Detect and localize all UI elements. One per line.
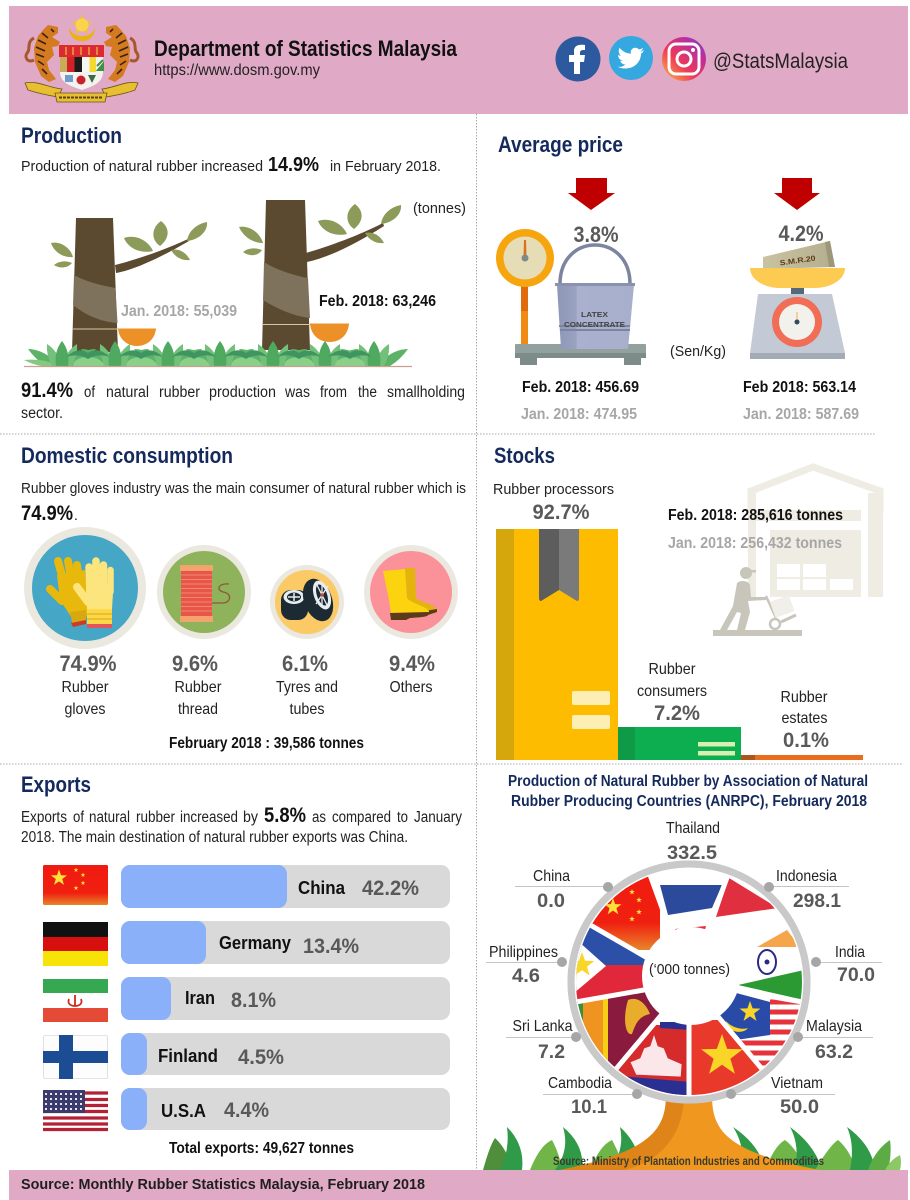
exports sentence: by: [243, 809, 258, 826]
icon: SMR 20 scale with rubber block: [750, 241, 845, 359]
heading: exports: Exports: [21, 772, 91, 797]
panel: ANRPC production: [483, 773, 901, 1170]
SMR20 January price: Jan. 2018: 587.69: [743, 406, 859, 423]
bar: Finland: [121, 1033, 450, 1075]
China value: China: [533, 868, 570, 885]
exports sentence: 5.8%: [264, 804, 306, 827]
chart title: Rubber Producing Countries (ANRPC), February 2018: [511, 793, 867, 810]
production growth sentence: Production of natural rubber increased: [21, 158, 263, 175]
Thailand value: [666, 820, 720, 864]
wheel unit label: (‘000 tonnes): [649, 961, 730, 978]
smallholding sentence: 91.4%: [21, 379, 73, 402]
smallholding sentence: production: [209, 384, 276, 401]
bar: rubber consumers: [618, 727, 741, 760]
icon: rubber gloves: [24, 527, 146, 649]
data source note: Source: Ministry of Plantation Industries and Commodities: [553, 1154, 824, 1168]
February stocks: Feb. 2018: 285,616 tonnes: [668, 507, 843, 524]
Indonesia value: [776, 868, 841, 912]
China value: 0.0: [537, 890, 565, 912]
Thailand value: Thailand: [666, 820, 720, 837]
bar: China: China: [298, 877, 346, 898]
wheel of flags: [568, 860, 810, 1104]
flag: China: [43, 865, 108, 905]
flag: USA: [43, 1090, 108, 1131]
smallholding sentence: sector.: [21, 405, 63, 422]
gloves value: 74.9%: [60, 651, 116, 676]
tree: January: [51, 218, 207, 352]
smallholding sentence: [21, 379, 465, 422]
flag: Iran: [43, 979, 108, 1022]
flag segment: Philippines: [576, 926, 645, 1002]
consumers label: [637, 661, 707, 700]
bar: USA: [121, 1088, 450, 1130]
total exports: Total exports: 49,627 tonnes: [169, 1140, 354, 1157]
flag segment: China: [591, 876, 660, 950]
estates label: estates: [782, 710, 828, 727]
icon: latex scale with bucket: LATEX: [581, 310, 608, 319]
Philippines value: Philippines: [489, 944, 558, 961]
Vietnam value: 50.0: [780, 1096, 819, 1118]
consumers value: 7.2%: [654, 702, 700, 725]
bar: China: 42.2%: [362, 877, 419, 900]
footer source: Source: Monthly Rubber Statistics Malaysia, February 2018: [21, 1176, 425, 1193]
unit label: (tonnes): [413, 200, 466, 217]
latex price change: 3.8%: [574, 222, 618, 247]
SMR20 February price: Feb 2018: 563.14: [743, 379, 856, 396]
grass on right: [483, 1127, 901, 1170]
Indonesia value: Indonesia: [776, 868, 837, 885]
smallholding sentence: natural: [106, 384, 149, 401]
bar: Germany: 13.4%: [303, 935, 359, 958]
Indonesia value: 298.1: [793, 890, 841, 912]
SMR20 price change: 4.2%: [778, 221, 824, 246]
leader lines and dots: [486, 882, 882, 1099]
smallholding sentence: was: [284, 384, 310, 401]
production growth sentence: 14.9%: [268, 154, 319, 176]
icon: facebook: [556, 36, 600, 82]
tyres label: [276, 679, 338, 718]
icon: rubber boots: [364, 545, 458, 639]
panel: domestic consumption: [21, 443, 466, 752]
heading: domestic consumption: Domestic consumption: [21, 443, 233, 468]
bar: Iran: Iran: [185, 987, 215, 1008]
Vietnam value: [771, 1075, 823, 1118]
India value: India: [835, 944, 865, 961]
social handle: @StatsMalaysia: [713, 50, 848, 73]
smallholding sentence: of: [84, 384, 96, 401]
Sri Lanka value: Sri Lanka: [512, 1018, 573, 1035]
exports sentence: as: [312, 809, 326, 826]
bar: China: [121, 865, 450, 908]
Cambodia value: 10.1: [571, 1096, 607, 1118]
exports sentence: of: [73, 809, 85, 826]
thread label: [174, 679, 222, 718]
consumers label: consumers: [637, 683, 707, 700]
India value: 70.0: [837, 964, 875, 986]
exports sentence: [21, 804, 462, 846]
bar: Finland: Finland: [158, 1045, 218, 1066]
flag segment: India: [739, 930, 802, 1000]
January production value: Jan. 2018: 55,039: [121, 303, 237, 320]
estates label: [780, 689, 828, 727]
latex January price: Jan. 2018: 474.95: [521, 406, 637, 423]
website url: https://www.dosm.gov.my: [154, 62, 320, 79]
bar: Finland: 4.5%: [238, 1046, 284, 1069]
tyres label: tubes: [290, 701, 324, 718]
bar: Germany: [121, 921, 450, 964]
icon: rubber thread spool: [157, 545, 251, 639]
department name: Department of Statistics Malaysia: [154, 36, 458, 61]
arrow: latex price down: [568, 178, 615, 210]
Sri Lanka value: 7.2: [538, 1041, 565, 1063]
estates label: Rubber: [780, 689, 828, 706]
flag segment: Vietnam: [690, 1020, 762, 1095]
exports sentence: compared: [332, 809, 391, 826]
tree: February: [239, 200, 401, 350]
tyres label: Tyres and: [276, 679, 338, 696]
gloves label: [62, 679, 109, 718]
Vietnam value: Vietnam: [771, 1075, 823, 1092]
others label: Others: [390, 679, 432, 696]
others value: 9.4%: [389, 651, 435, 676]
grass strip: [24, 341, 412, 366]
Sri Lanka value: [512, 1018, 573, 1063]
February production value: Feb. 2018: 63,246: [319, 293, 436, 310]
icon: SMR 20 scale with rubber block: S.M.R.20: [779, 254, 816, 267]
smallholding sentence: the: [358, 384, 377, 401]
icon: latex scale with bucket: CONCENTRATE: [564, 320, 625, 329]
flag: Finland: [43, 1035, 108, 1079]
Malaysia value: 63.2: [815, 1041, 853, 1063]
bar: Iran: [121, 977, 450, 1020]
Thailand value: 332.5: [667, 842, 717, 864]
Philippines value: [489, 944, 558, 987]
panel: stocks: [493, 443, 883, 760]
bar: USA: 4.4%: [224, 1099, 269, 1122]
heading: average price: Average price: [498, 132, 623, 157]
Malaysia value: Malaysia: [806, 1018, 862, 1035]
estates value: 0.1%: [783, 729, 829, 752]
icon: coat of arms of Malaysia: [25, 14, 138, 102]
icon: instagram: [662, 37, 706, 81]
thread label: Rubber: [174, 679, 222, 696]
exports sentence: Exports: [21, 809, 67, 826]
bar: rubber estates: [741, 755, 863, 760]
Cambodia value: [548, 1075, 612, 1118]
bar: rubber processors: [496, 529, 618, 760]
production growth sentence: in February 2018.: [330, 158, 441, 175]
China value: [533, 868, 570, 912]
header band: [9, 6, 908, 114]
India value: [835, 944, 875, 986]
exports sentence: to: [397, 809, 408, 826]
tyres value: 6.1%: [282, 651, 328, 676]
exports sentence: natural: [89, 809, 130, 826]
Cambodia value: Cambodia: [548, 1075, 612, 1092]
flag segment: Cambodia: [616, 1022, 688, 1095]
gloves label: gloves: [64, 701, 106, 718]
Philippines value: 4.6: [512, 965, 540, 987]
gloves label: Rubber: [62, 679, 109, 696]
flag segment: Thailand: [660, 885, 722, 930]
price unit: (Sen/Kg): [670, 343, 726, 360]
thread label: thread: [178, 701, 218, 718]
latex February price: Feb. 2018: 456.69: [522, 379, 639, 396]
smallholding sentence: smallholding: [387, 384, 465, 401]
processors value: 92.7%: [532, 501, 590, 524]
consumers label: Rubber: [648, 661, 696, 678]
heading: stocks: Stocks: [494, 443, 555, 468]
bar: USA: U.S.A: [161, 1100, 206, 1121]
smallholding sentence: from: [320, 384, 347, 401]
thread value: 9.6%: [172, 651, 218, 676]
bar: Germany: Germany: [219, 932, 292, 953]
consumption key figure: .: [74, 507, 78, 523]
consumption sentence: Rubber gloves industry was the main consumer of natural rubber which is: [21, 480, 466, 497]
Malaysia value: [806, 1018, 862, 1063]
icon: twitter: [609, 36, 653, 80]
flag segment: Sri Lanka: [578, 992, 660, 1068]
footer band: [9, 1170, 908, 1200]
illustration: warehouse and worker: [713, 467, 883, 636]
panel: average price: [496, 132, 859, 423]
arrow: SMR20 price down: [774, 178, 820, 210]
exports sentence: increased: [180, 809, 238, 826]
consumption key figure: 74.9%: [21, 502, 73, 525]
bar: Iran: 8.1%: [231, 989, 276, 1012]
exports sentence: January: [414, 809, 462, 826]
exports sentence: rubber: [136, 809, 175, 826]
consumption total: February 2018 : 39,586 tonnes: [169, 735, 364, 752]
icon: latex scale with bucket: [496, 229, 646, 365]
smallholding sentence: rubber: [159, 384, 200, 401]
tree trunk: [560, 1095, 820, 1170]
January stocks: Jan. 2018: 256,432 tonnes: [668, 535, 842, 552]
processors label: Rubber processors: [493, 481, 614, 498]
panel: exports: [21, 772, 462, 1157]
flag segment: Indonesia: [716, 878, 775, 917]
exports sentence: 2018. The main destination of natural rubber exports was China.: [21, 829, 408, 846]
heading: production: Production: [21, 123, 122, 148]
icon: tyres and tubes: [270, 565, 344, 639]
flag: Germany: [43, 922, 108, 966]
flag segment: Malaysia: [720, 993, 800, 1066]
panel: production: [21, 123, 466, 422]
chart title: Production of Natural Rubber by Association of Natural: [508, 773, 868, 790]
